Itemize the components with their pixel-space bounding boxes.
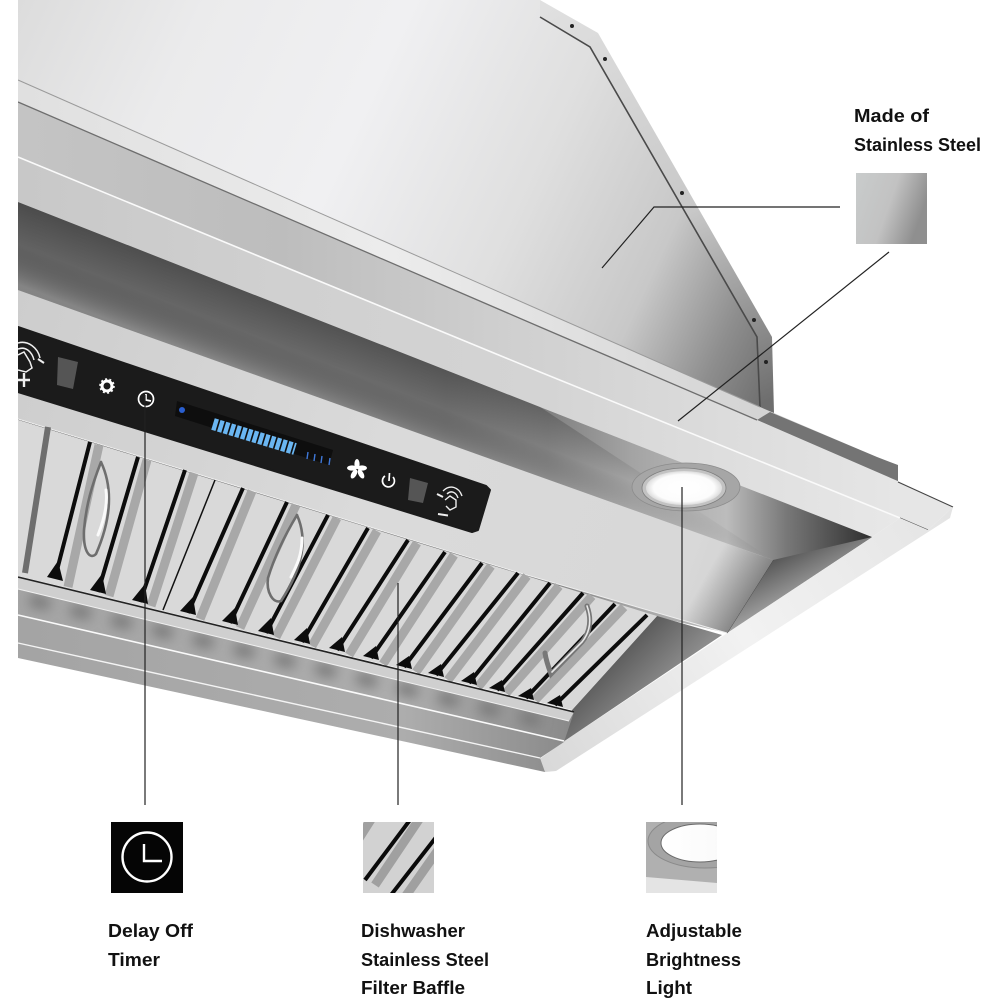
callout: adjustable brightness light bbox=[646, 822, 742, 998]
leader lines bbox=[145, 207, 889, 805]
front panel bbox=[18, 290, 773, 633]
icon: power bbox=[382, 473, 394, 487]
callout: dishwasher filter baffle: Dishwasher bbox=[361, 921, 465, 941]
icon: fan bbox=[347, 459, 367, 480]
callout: adjustable brightness light: Light bbox=[646, 978, 692, 998]
LED display window bbox=[175, 401, 333, 465]
bottom rail bbox=[18, 577, 574, 772]
icon: gear bbox=[100, 379, 114, 393]
right touch gesture icon bbox=[437, 487, 462, 516]
recessed cavity bbox=[18, 202, 872, 633]
chimney body bbox=[18, 0, 774, 413]
callout: adjustable brightness light: Brightness bbox=[646, 950, 741, 970]
baffle filter section bbox=[18, 420, 657, 710]
icon: timer clock bbox=[138, 392, 154, 406]
dark gap at baffle end bbox=[563, 616, 722, 742]
callout: delay off timer bbox=[108, 822, 194, 970]
top flange bands bbox=[18, 80, 953, 537]
adjustable LED light bbox=[632, 463, 740, 511]
callout: made of stainless steel bbox=[854, 106, 981, 244]
callout: made of stainless steel: Made of bbox=[854, 106, 930, 126]
frame side rim bbox=[530, 507, 953, 772]
callout: made of stainless steel: Stainless Steel bbox=[854, 135, 981, 155]
callout: adjustable brightness light: Adjustable bbox=[646, 921, 742, 941]
left white margin bbox=[0, 0, 18, 1000]
left touch gesture icon bbox=[18, 342, 44, 387]
callout: dishwasher filter baffle: Filter Baffle bbox=[361, 978, 465, 998]
callout: delay off timer: Delay Off bbox=[108, 921, 194, 941]
right display window bbox=[408, 478, 428, 503]
baffle handles bbox=[84, 462, 590, 674]
callout: dishwasher filter baffle: Stainless Steel bbox=[361, 950, 489, 970]
range hood product illustration bbox=[18, 0, 953, 772]
control panel bbox=[18, 327, 490, 532]
left display window bbox=[57, 357, 78, 389]
callout: delay off timer: Timer bbox=[108, 950, 160, 970]
callout: dishwasher filter baffle bbox=[358, 818, 489, 998]
